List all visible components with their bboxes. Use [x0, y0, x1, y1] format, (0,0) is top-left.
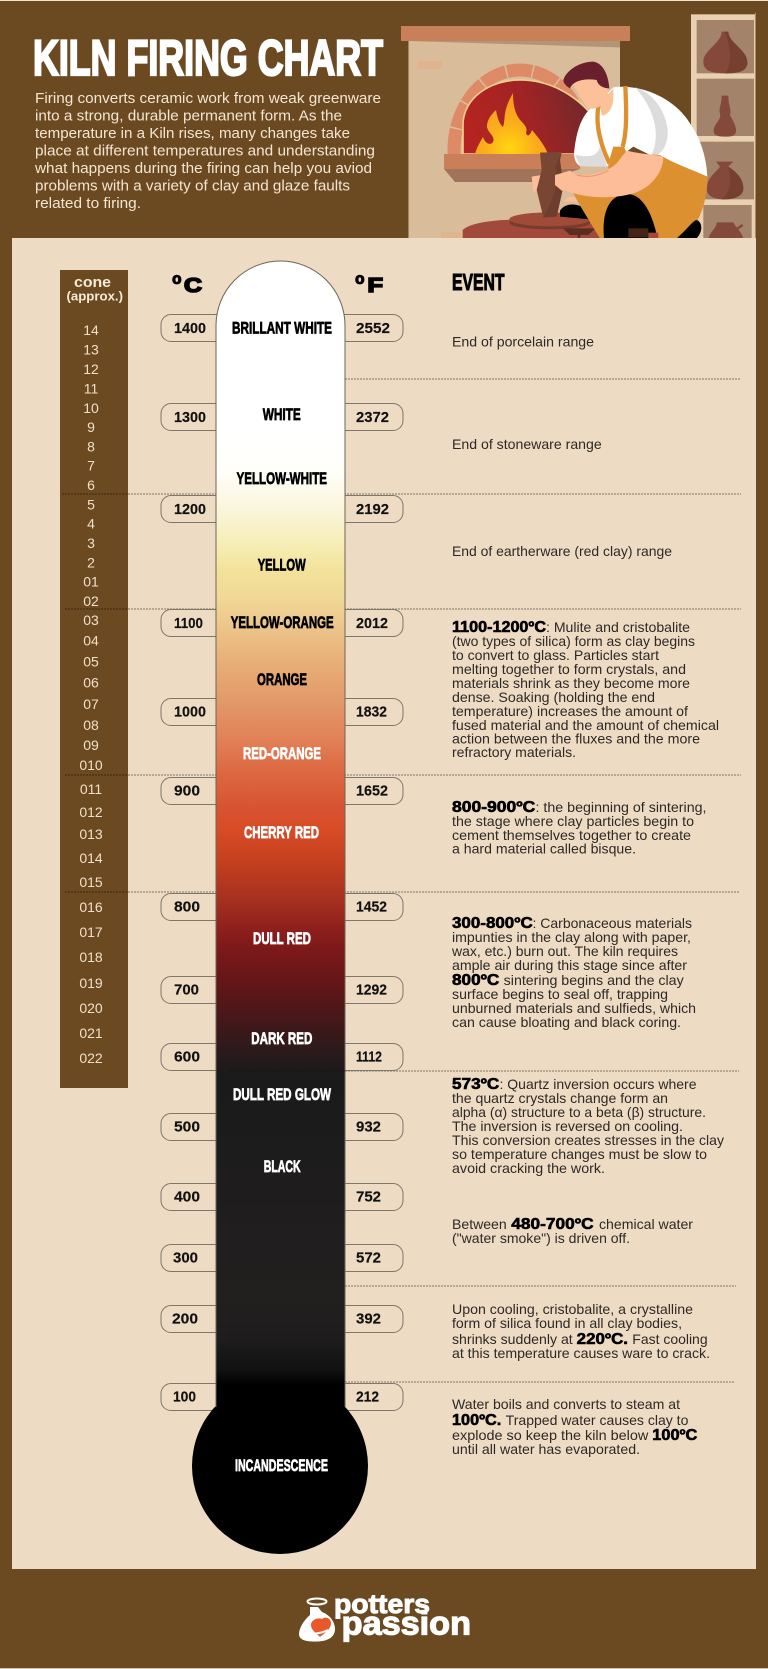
celsius scale: 800: [174, 900, 200, 916]
colour band labels: YELLOW-ORANGE: [231, 614, 334, 632]
cone numbers: 2: [87, 554, 95, 570]
cone numbers: 03: [83, 612, 99, 628]
event: 220C cristobalite: Upon cooling, cristobalite, a crystalline: [452, 1301, 693, 1317]
cone heading: cone: [74, 274, 111, 291]
event: 480-700C chemical water: [452, 1216, 693, 1246]
event: 573C quartz inversion: : Quartz inversion occurs where: [500, 1076, 697, 1092]
event: 100C water boils: explode so keep the kiln below: [452, 1427, 649, 1443]
fahrenheit scale: 752: [356, 1190, 381, 1206]
column heading: celsius: [172, 269, 202, 299]
event: 1100-1200C: (two types of silica) form as clay begins: [452, 633, 695, 649]
event: 573C quartz inversion: alpha (α) structure to a beta (β) structure.: [452, 1104, 706, 1120]
cone numbers: 018: [79, 949, 103, 965]
event: 300-800C: impunties in the clay along with paper,: [452, 929, 691, 945]
event: 800-900C: [452, 799, 706, 856]
thermometer: [192, 261, 368, 1554]
event: 1100-1200C: [452, 619, 719, 760]
event: 300-800C: 300-800ºC: [452, 915, 533, 932]
fahrenheit scale: 2192: [356, 502, 389, 518]
cone numbers: 5: [87, 496, 95, 512]
cone heading: (approx.): [66, 288, 123, 304]
event: 573C quartz inversion: avoid cracking the work.: [452, 1160, 605, 1176]
panel: cone column: [60, 270, 128, 1088]
fahrenheit scale: 2372: [356, 410, 389, 426]
cone heading: [66, 274, 123, 304]
event: 300-800C: sintering begins and the clay: [504, 972, 684, 988]
fahrenheit scale: 1292: [356, 982, 387, 998]
celsius scale: 200: [172, 1312, 198, 1328]
cone numbers: 13: [83, 342, 99, 358]
event: 1100-1200C: refractory materials.: [452, 744, 576, 760]
event: 800-900C: the stage where clay particles begin to: [452, 813, 694, 829]
intro paragraph: what happens during the firing can help you aviod: [34, 160, 372, 177]
column heading: event: EVENT: [452, 269, 505, 295]
cone numbers: 017: [79, 924, 103, 940]
event: 220C cristobalite: at this temperature causes ware to crack.: [452, 1345, 710, 1361]
colour band labels: WHITE: [263, 406, 301, 424]
cone numbers: 013: [79, 826, 103, 842]
event: 100C water boils: 100ºC.: [452, 1412, 501, 1429]
event: 1100-1200C: fused material and the amount of chemical: [452, 717, 719, 733]
event: 300-800C: [451, 915, 696, 1030]
event: 100C water boils: 100ºC: [652, 1427, 697, 1444]
celsius scale: 1200: [174, 502, 206, 518]
event: 1100-1200C: : Mulite and cristobalite: [546, 619, 690, 635]
cone numbers: 02: [83, 593, 99, 609]
event: 1100-1200C: materials shrink as they become more: [452, 675, 690, 691]
cone numbers: 6: [87, 477, 95, 493]
intro paragraph: into a strong, durable permanent form. As the: [35, 108, 342, 124]
celsius scale: 100: [173, 1390, 196, 1406]
intro paragraph: Firing converts ceramic work from weak greenware: [35, 90, 381, 107]
cone numbers: 012: [79, 804, 103, 820]
cone numbers: 015: [79, 874, 103, 890]
colour band labels: ORANGE: [257, 671, 307, 689]
colour band labels: DARK RED: [251, 1030, 312, 1048]
fahrenheit scale: 2012: [356, 616, 388, 632]
cone numbers: 10: [83, 400, 99, 416]
event: 573C quartz inversion: so temperature changes must be slow to: [452, 1146, 707, 1162]
intro paragraph: temperature in a Kiln rises, many changes take: [35, 125, 350, 142]
fahrenheit scale: 1112: [356, 1050, 382, 1066]
event: 300-800C: surface begins to seal off, trapping: [452, 986, 668, 1002]
fahrenheit scale: 1652: [356, 784, 388, 800]
event: 220C cristobalite: Fast cooling: [632, 1331, 708, 1347]
event: 100C water boils: until all water has evaporated.: [452, 1441, 640, 1457]
event: 300-800C: can cause bloating and black coring.: [452, 1014, 681, 1030]
intro paragraph: problems with a variety of clay and glaze faults: [35, 178, 350, 194]
event: 220C cristobalite: 220ºC.: [577, 1331, 628, 1348]
event: 573C quartz inversion: 573ºC: [452, 1076, 499, 1093]
intro paragraph: related to firing.: [35, 195, 141, 212]
celsius scale: 300: [173, 1250, 198, 1266]
cone numbers: [79, 322, 103, 1066]
icon: kiln: [401, 26, 630, 238]
colour band labels: YELLOW: [258, 557, 306, 575]
event: 573C quartz inversion: The inversion is reversed on cooling.: [452, 1118, 683, 1134]
cone numbers: 01: [83, 574, 99, 590]
cone numbers: 014: [79, 850, 103, 866]
celsius scale: [161, 314, 241, 1410]
event: 1100-1200C: melting together to form crystals, and: [452, 661, 686, 677]
logo wordmark: potters: [334, 1589, 430, 1619]
cone numbers: 14: [83, 322, 99, 338]
event: 1100-1200C: 1100-1200ºC: [452, 619, 546, 636]
event: end of porcelain range: End of porcelain range: [452, 334, 594, 350]
intro paragraph: [34, 90, 381, 212]
event: 100C water boils: Trapped water causes clay to: [506, 1412, 689, 1428]
event: 100C water boils: Water boils and converts to steam at: [452, 1396, 680, 1412]
event: 220C cristobalite: form of silica found in all clay bodies,: [452, 1315, 682, 1331]
celsius scale: 500: [174, 1120, 200, 1136]
event: 300-800C: wax, etc.) burn out. The kiln requires: [451, 943, 678, 959]
fahrenheit scale: 1832: [356, 704, 387, 720]
celsius scale: 900: [174, 784, 200, 800]
cone numbers: 022: [79, 1050, 103, 1066]
colour band labels: [231, 320, 334, 1475]
cone numbers: 021: [79, 1025, 103, 1041]
event: 573C quartz inversion: This conversion creates stresses in the clay: [452, 1132, 724, 1148]
cone numbers: 8: [87, 438, 95, 454]
celsius scale: 400: [174, 1190, 200, 1206]
event: end of earthenware range: End of eartherware (red clay) range: [452, 543, 672, 559]
event: 1100-1200C: to convert to glass. Particles start: [452, 647, 659, 663]
cone numbers: 010: [79, 757, 103, 773]
cone numbers: 11: [84, 381, 98, 397]
cone numbers: 09: [83, 737, 99, 753]
event: end of stoneware range: End of stoneware range: [452, 436, 602, 452]
logo wordmark: passion: [342, 1604, 471, 1641]
colour band labels: BLACK: [264, 1158, 301, 1176]
event: 300-800C: unburned materials and sulfieds, which: [452, 1000, 696, 1016]
event: 220C cristobalite: shrinks suddenly at: [452, 1331, 573, 1347]
event: 800-900C: cement themselves together to create: [452, 827, 691, 843]
cone numbers: 12: [83, 361, 99, 377]
celsius scale: 1000: [174, 704, 206, 720]
celsius scale: 700: [174, 982, 199, 998]
colour band labels: BRILLANT WHITE: [232, 320, 332, 338]
event: 800-900C: a hard material called bisque.: [452, 840, 636, 856]
cone numbers: 016: [79, 899, 103, 915]
cone numbers: 3: [87, 535, 95, 551]
event: 100C water boils: [452, 1396, 697, 1457]
fahrenheit scale: 2552: [356, 321, 390, 337]
column heading: fahrenheit: F: [368, 275, 383, 297]
colour band labels: DULL RED: [253, 930, 311, 948]
event: 1100-1200C: temperature) increases the amount of: [452, 703, 688, 719]
fahrenheit scale: 572: [356, 1250, 381, 1266]
column heading: fahrenheit: º: [355, 269, 365, 299]
cone numbers: 9: [87, 419, 95, 435]
icon: shelf with pots: [691, 13, 756, 238]
title: KILN FIRING CHART: [33, 30, 383, 86]
fahrenheit scale: [323, 314, 403, 1410]
event: 480-700C chemical water: ("water smoke") is driven off.: [452, 1230, 630, 1246]
event: 220C cristobalite: [452, 1301, 710, 1361]
event: 480-700C chemical water: chemical water: [599, 1216, 693, 1232]
event: 800-900C: : the beginning of sintering,: [536, 799, 706, 815]
cone numbers: 020: [79, 1000, 103, 1016]
event: 1100-1200C: dense. Soaking (holding the end: [452, 689, 655, 705]
colour band labels: RED-ORANGE: [243, 745, 321, 763]
colour band labels: CHERRY RED: [244, 824, 319, 842]
event: 480-700C chemical water: 480-700ºC: [511, 1216, 594, 1233]
colour band labels: DULL RED GLOW: [233, 1086, 331, 1104]
cone numbers: 07: [83, 696, 99, 712]
colour band labels: YELLOW-WHITE: [236, 470, 327, 488]
celsius scale: 1400: [174, 321, 206, 337]
event: 300-800C: 800ºC: [452, 972, 499, 989]
logo wordmark: [334, 1589, 471, 1641]
celsius scale: 1100: [174, 616, 203, 632]
event: 573C quartz inversion: [452, 1076, 724, 1176]
event: 300-800C: : Carbonaceous materials: [532, 915, 692, 931]
column heading: celsius: º: [172, 269, 182, 299]
event: 480-700C chemical water: Between: [452, 1216, 507, 1232]
cone numbers: 4: [87, 516, 95, 532]
cone numbers: 08: [83, 717, 99, 733]
panel: chart: [12, 238, 756, 1569]
event: 800-900C: 800-900ºC: [452, 799, 535, 816]
event: 1100-1200C: action between the fluxes and the more: [452, 730, 700, 746]
fahrenheit scale: 1452: [356, 900, 387, 916]
celsius scale: 600: [174, 1050, 200, 1066]
cone numbers: 7: [87, 458, 95, 474]
colour band labels: INCANDESCENCE: [235, 1457, 328, 1475]
cone numbers: 019: [79, 975, 103, 991]
intro paragraph: place at different temperatures and understanding: [35, 142, 375, 160]
column heading: celsius: C: [184, 275, 202, 297]
cone numbers: 011: [80, 781, 102, 797]
fahrenheit scale: 932: [356, 1120, 381, 1136]
cone numbers: 05: [83, 654, 99, 670]
logo: potters passion: [299, 1589, 471, 1642]
column heading: fahrenheit: [355, 269, 383, 299]
event: 300-800C: ample air during this stage since after: [452, 957, 687, 973]
cone numbers: 04: [83, 633, 99, 649]
celsius scale: 1300: [174, 410, 206, 426]
icon: potter: [463, 62, 707, 238]
icon: pot with heart: [299, 1598, 335, 1642]
event: 573C quartz inversion: the quartz crystals change form an: [452, 1090, 668, 1106]
fahrenheit scale: 212: [356, 1390, 379, 1406]
fahrenheit scale: 392: [356, 1312, 381, 1328]
illustration: potter at kiln: [401, 13, 756, 238]
cone numbers: 06: [83, 675, 99, 691]
